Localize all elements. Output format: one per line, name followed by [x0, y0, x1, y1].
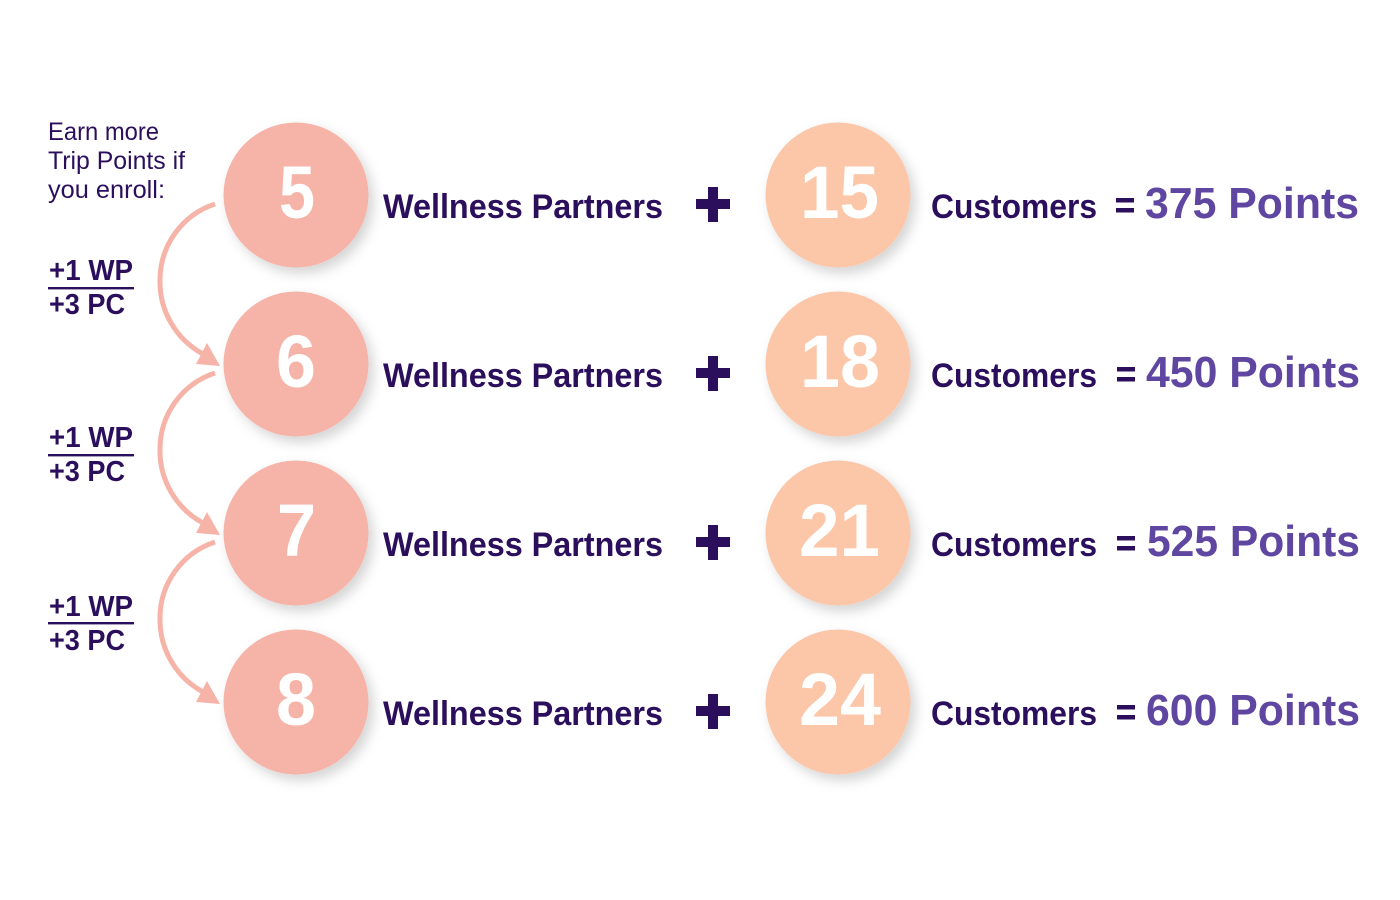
- intro text: earn more: Trip Points if: [48, 147, 185, 175]
- row 3: [224, 460, 1360, 606]
- wellness partner circle 7: [224, 460, 368, 606]
- fraction label: second step: [48, 422, 134, 488]
- plus sign: [696, 525, 730, 560]
- intro text: earn more: [48, 118, 185, 204]
- fraction label: first step: +1 WP: [49, 255, 133, 287]
- row 2: [224, 292, 1360, 436]
- row 4: [224, 630, 1360, 774]
- arrow: 7 to 8: [160, 542, 220, 704]
- points total 600: 600 Points: [1146, 686, 1360, 735]
- label: wellness partners: Wellness Partners: [383, 357, 663, 395]
- customer circle 15: [766, 122, 910, 268]
- label: customers: Customers: [931, 526, 1097, 564]
- fraction label: third step: +3 PC: [49, 625, 125, 657]
- equals sign: [1116, 198, 1134, 212]
- equals sign: [1117, 367, 1135, 382]
- arrow: 5 to 6: [160, 204, 220, 366]
- points total 525: 525 Points: [1147, 517, 1360, 566]
- arrow: 6 to 7: [160, 373, 220, 535]
- wellness partner circle 7: 7: [277, 489, 316, 572]
- wellness partner circle 8: 8: [276, 658, 316, 741]
- fraction label: second step: +1 WP: [49, 422, 133, 454]
- equals sign: [1117, 536, 1135, 550]
- label: customers: Customers: [931, 188, 1097, 226]
- customer circle 18: 18: [800, 320, 880, 403]
- fraction label: first step: [48, 255, 134, 321]
- fraction label: first step: +3 PC: [49, 289, 125, 321]
- equals sign: [1117, 705, 1135, 720]
- customer circle 15: 15: [800, 151, 879, 234]
- plus sign: [696, 187, 730, 222]
- points total 450: 450 Points: [1146, 348, 1360, 397]
- wellness partner circle 5: [224, 122, 368, 268]
- wellness partner circle 8: [224, 630, 368, 774]
- row 1: [224, 122, 1359, 268]
- label: wellness partners: Wellness Partners: [383, 188, 663, 226]
- label: wellness partners: Wellness Partners: [383, 695, 663, 733]
- label: customers: Customers: [931, 695, 1097, 733]
- customer circle 24: [766, 630, 910, 774]
- fraction label: second step: +3 PC: [49, 456, 125, 488]
- wellness partner circle 6: 6: [276, 320, 316, 403]
- plus sign: [696, 356, 730, 391]
- wellness partner circle 5: 5: [279, 151, 315, 234]
- customer circle 24: 24: [799, 658, 881, 741]
- wellness partner circle 6: [224, 292, 368, 436]
- label: customers: Customers: [931, 357, 1097, 395]
- intro text: earn more: you enroll:: [48, 176, 165, 204]
- plus sign: [696, 694, 730, 729]
- label: wellness partners: Wellness Partners: [383, 526, 663, 564]
- points total 375: 375 Points: [1145, 179, 1359, 228]
- fraction label: third step: [48, 591, 134, 657]
- customer circle 21: [766, 460, 910, 606]
- customer circle 18: [766, 292, 910, 436]
- intro text: earn more: Earn more: [48, 118, 159, 146]
- fraction label: third step: +1 WP: [49, 591, 133, 623]
- customer circle 21: 21: [799, 489, 880, 572]
